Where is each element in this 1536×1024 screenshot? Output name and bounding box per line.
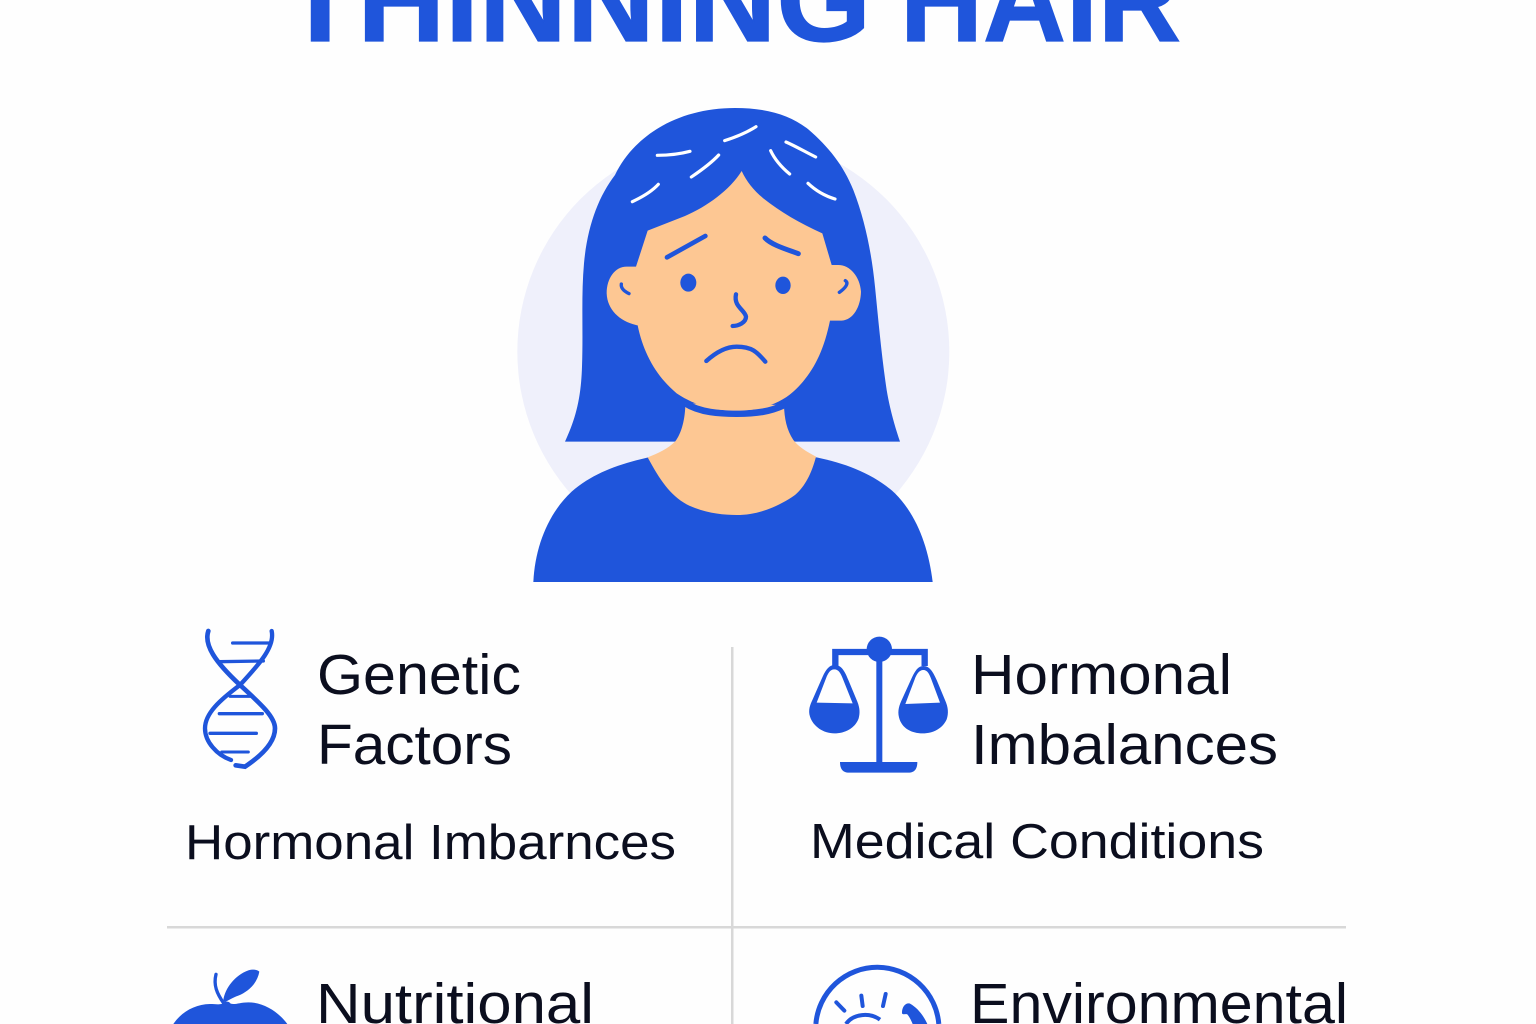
chin shadow line — [685, 403, 784, 414]
panel: environmental — [816, 967, 1348, 1024]
icon: apple — [173, 970, 287, 1024]
icon: environmental circle — [816, 967, 939, 1024]
heading: Genetic Factors: Factors — [317, 713, 512, 777]
right eyebrow — [765, 238, 798, 254]
white hair strands — [632, 127, 835, 202]
heading: Hormonal Imbalances: Imbalances — [971, 713, 1278, 777]
background circle — [517, 136, 949, 568]
heading: Genetic Factors: Genetic — [317, 643, 521, 707]
icon: balance scales — [809, 637, 948, 773]
panel: nutritional — [173, 970, 594, 1024]
label: Medical Conditions: Medical Conditions — [810, 815, 1264, 869]
horizontal divider — [167, 926, 1346, 928]
vertical divider — [731, 647, 734, 1024]
face and ears — [607, 171, 861, 411]
panel: genetic factors — [185, 631, 676, 870]
neck — [648, 403, 816, 515]
shirt — [533, 457, 933, 582]
left eyebrow — [667, 236, 705, 257]
right eye — [775, 277, 791, 294]
icon: DNA helix — [205, 631, 275, 767]
label: Hormonal Imbarnces: Hormonal Imbarnces — [185, 816, 676, 870]
left ear detail — [621, 284, 629, 294]
illustration: worried woman with thinning hair — [517, 108, 949, 582]
right ear detail — [839, 281, 847, 292]
mouth — [706, 347, 765, 362]
nose — [733, 294, 746, 326]
heading: Hormonal Imbalances: Hormonal — [971, 643, 1232, 707]
facial features — [621, 236, 847, 362]
hair — [565, 108, 900, 442]
left eye — [680, 274, 696, 292]
panel: hormonal imbalances — [809, 637, 1278, 869]
